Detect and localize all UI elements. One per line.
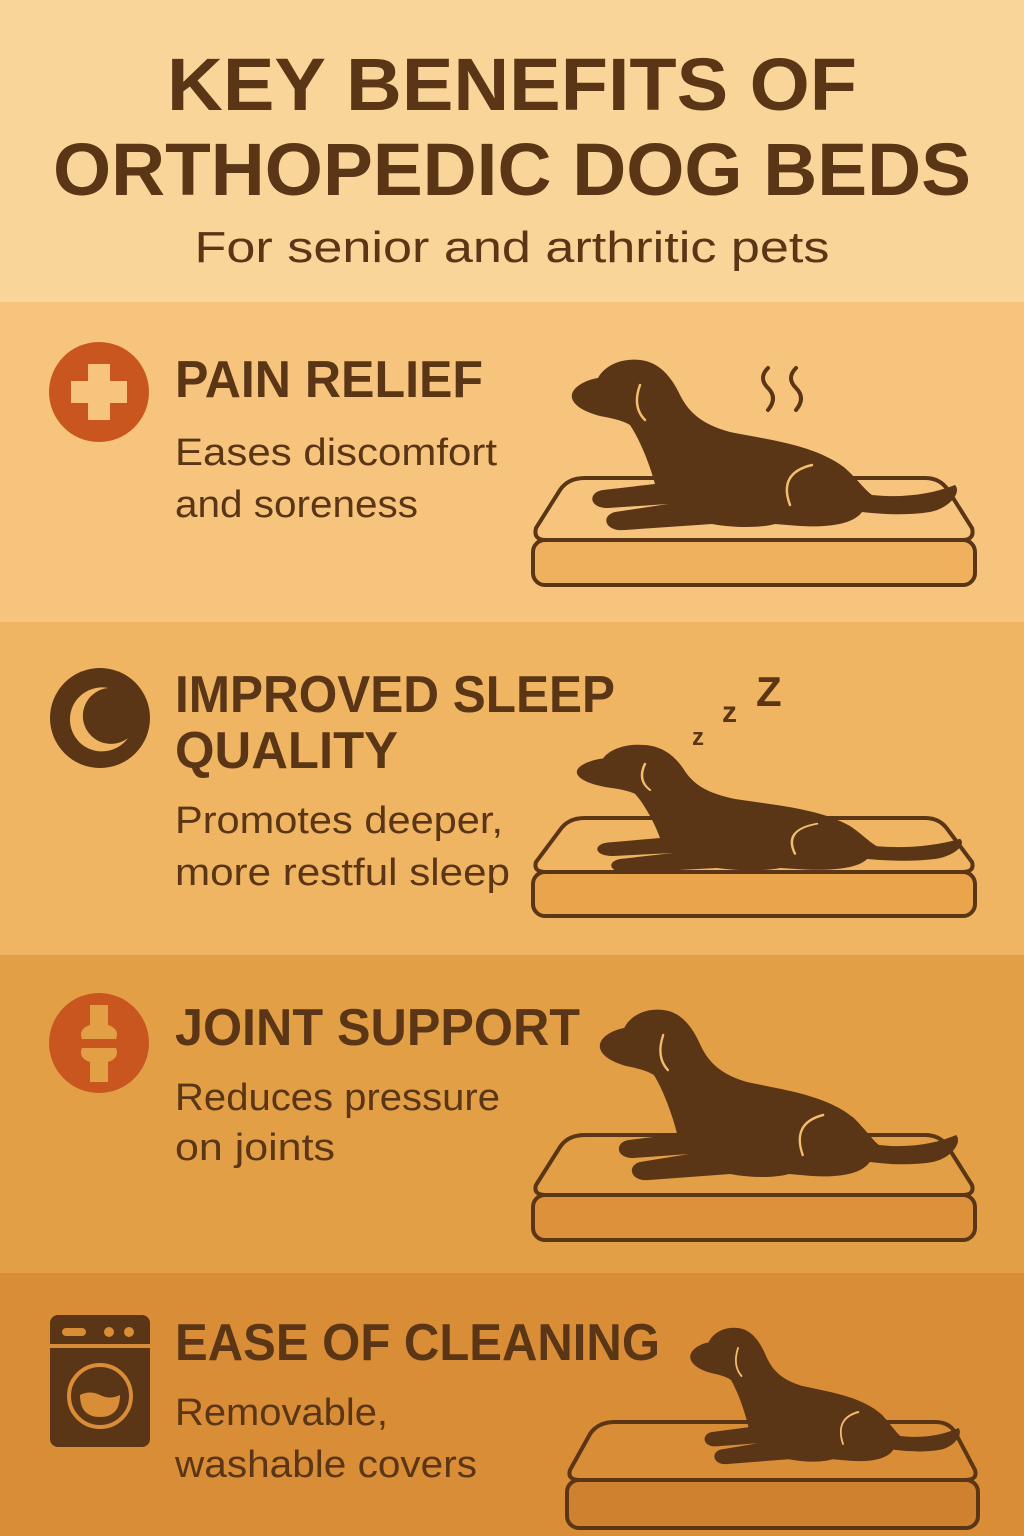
band: sleep background [0, 622, 1024, 955]
band: joint background [0, 955, 1024, 1273]
text: pain relief description: Eases discomfort [175, 432, 497, 474]
icon: joint [49, 993, 149, 1093]
text: sleep description: more restful sleep [175, 852, 510, 894]
heading: joint support: JOINT SUPPORT [175, 999, 580, 1057]
title [53, 43, 971, 211]
band: pain relief background [0, 302, 1024, 622]
heading: ease of cleaning: EASE OF CLEANING [175, 1314, 660, 1372]
text: sleep description [175, 800, 510, 894]
text: joint description [175, 1077, 500, 1169]
text: sleep description: Promotes deeper, [175, 800, 503, 842]
illustration: dog on bed with steam [533, 360, 975, 585]
text: cleaning description: Removable, [175, 1392, 388, 1434]
text: pain relief description [175, 432, 497, 526]
heading: improved sleep quality: QUALITY [175, 722, 398, 780]
illustration: sleeping dog on bed [533, 668, 975, 916]
title: ORTHOPEDIC DOG BEDS [53, 128, 971, 211]
panel: pain relief [49, 342, 975, 585]
illustration: sleeping dog on bed: Z [756, 668, 782, 715]
title: KEY BENEFITS OF [167, 43, 857, 126]
subtitle: For senior and arthritic pets [194, 223, 830, 272]
heading: improved sleep quality: IMPROVED SLEEP [175, 666, 615, 724]
panel: joint support [49, 993, 975, 1240]
heading: pain relief: PAIN RELIEF [175, 351, 483, 409]
panel: ease of cleaning [50, 1314, 978, 1528]
illustration: sleeping dog on bed: z [692, 724, 704, 751]
text: joint description: on joints [175, 1127, 335, 1169]
icon: washing machine [50, 1315, 150, 1447]
heading: improved sleep quality [175, 666, 615, 780]
illustration: sleeping dog on bed: z [722, 696, 737, 729]
text: cleaning description [174, 1392, 477, 1486]
panel: improved sleep [50, 666, 975, 916]
text: pain relief description: and soreness [175, 484, 418, 526]
illustration: dog on bed [533, 1010, 975, 1240]
illustration: dog on bed [567, 1328, 978, 1528]
band: cleaning background [0, 1273, 1024, 1536]
icon: moon [50, 668, 150, 768]
icon: moon: z [118, 707, 125, 723]
icon: medical cross [49, 342, 149, 442]
text: cleaning description: washable covers [174, 1444, 477, 1486]
text: joint description: Reduces pressure [175, 1077, 500, 1119]
header background [0, 0, 1024, 302]
